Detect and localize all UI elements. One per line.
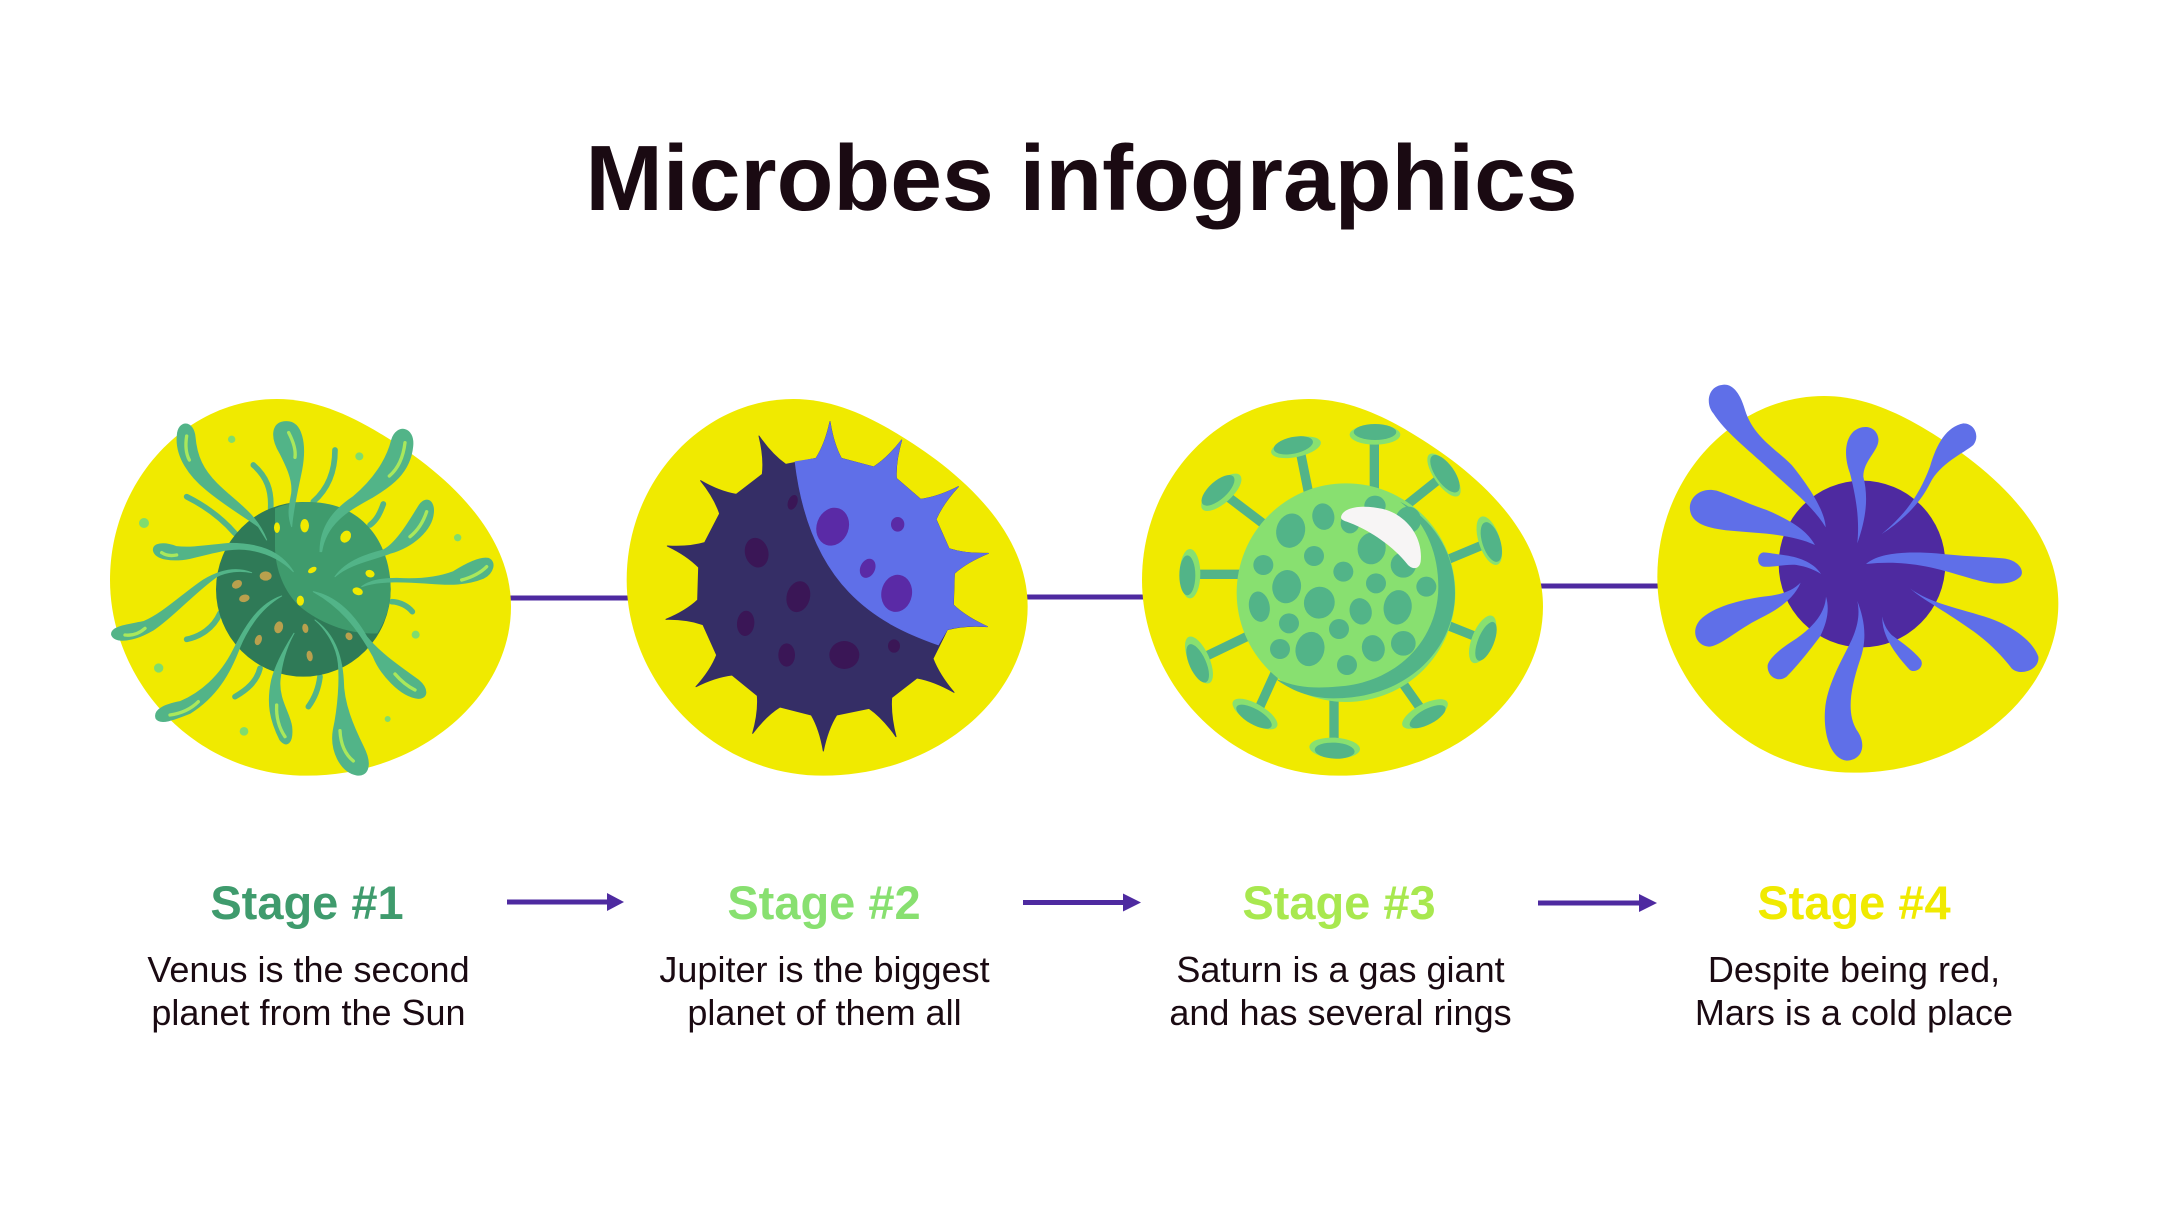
- title: Microbes infographics: [585, 126, 1578, 230]
- yellow and tan dots: [274, 519, 376, 606]
- small back tentacles: [187, 450, 412, 707]
- yellow blob 1: [110, 399, 511, 776]
- yellow blob 3: [1142, 399, 1543, 776]
- arrow: stage 1 to 2: [507, 893, 624, 911]
- teardrop tentacles: [112, 422, 493, 775]
- white highlight: [1341, 507, 1421, 568]
- stage 1 description: Venus is the second: [147, 949, 470, 990]
- microbe 4 illustration: [1657, 385, 2058, 773]
- dark craters on shaded side: [736, 494, 900, 669]
- stage 3 heading: Stage #3: [1242, 876, 1436, 929]
- stage 2 description: Jupiter is the biggest: [659, 949, 990, 990]
- stage 2 text: [659, 876, 990, 1033]
- stage 4 description: Mars is a cold place: [1695, 992, 2013, 1033]
- blue arms: [1690, 385, 2038, 761]
- stage 2 heading: Stage #2: [727, 876, 921, 929]
- arrow: stage 2 to 3: [1023, 894, 1141, 912]
- virus body: [1237, 483, 1455, 702]
- stage 3 text: [1169, 876, 1512, 1033]
- tentacle highlights: [125, 433, 487, 761]
- stage 1 description: planet from the Sun: [151, 992, 466, 1033]
- microbe 3 illustration: [1142, 399, 1543, 776]
- lit side of body: [275, 502, 391, 633]
- yellow blob 4: [1657, 396, 2058, 773]
- virus stalk caps, light rims: [1179, 425, 1507, 760]
- spiky dark body: [666, 422, 988, 751]
- microbe 1 illustration: [110, 399, 511, 776]
- virus stalk caps, dark centres: [1179, 424, 1506, 760]
- stage 2 description: planet of them all: [687, 992, 962, 1033]
- stage 3 description: and has several rings: [1169, 992, 1512, 1033]
- microbe body: [216, 502, 391, 677]
- stage 4 heading: Stage #4: [1757, 876, 1951, 929]
- stage 1 text: [147, 876, 470, 1033]
- arrow: stage 3 to 4: [1538, 894, 1657, 912]
- stage 4 description: Despite being red,: [1708, 949, 2000, 990]
- shaded crescent: [1275, 502, 1455, 698]
- virus stalks: [1192, 437, 1487, 747]
- stage 3 description: Saturn is a gas giant: [1176, 949, 1505, 990]
- yellow blob 2: [627, 399, 1028, 776]
- microbe 2 illustration: [627, 399, 1028, 776]
- purple body: [1779, 481, 1945, 647]
- connector lines between microbes: [505, 586, 1665, 598]
- small floating spots: [139, 436, 461, 736]
- virus surface spots: [1246, 496, 1436, 675]
- purple craters on lit side: [811, 503, 915, 614]
- stage 1 heading: Stage #1: [210, 876, 404, 929]
- stage 4 text: [1695, 876, 2013, 1033]
- lit blue side of body: [795, 422, 988, 645]
